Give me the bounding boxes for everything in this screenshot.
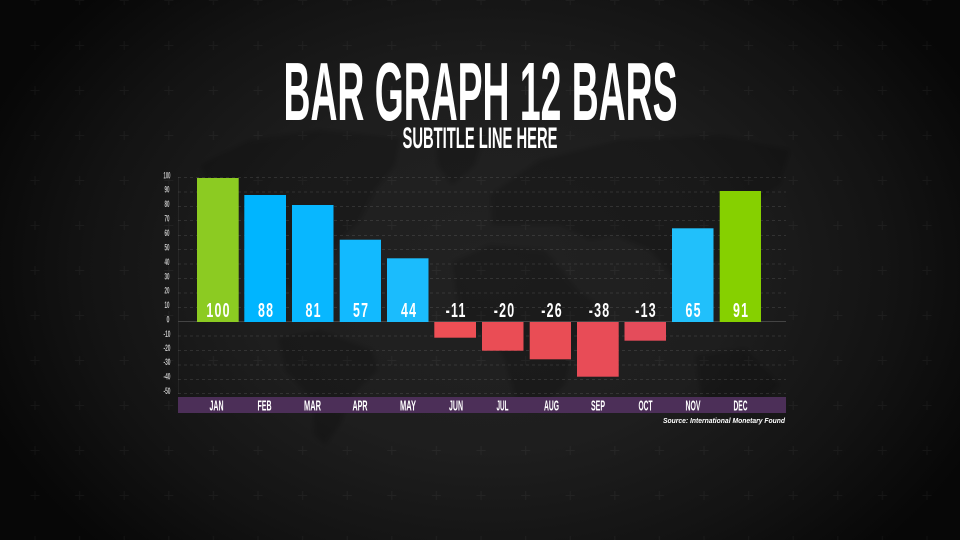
y axis labels: 90 xyxy=(164,184,170,196)
y axis labels: 0 xyxy=(166,314,170,326)
world map background xyxy=(200,130,790,445)
bar: DEC 91 xyxy=(720,191,761,322)
month labels: MAY xyxy=(400,398,416,414)
chart grid lines xyxy=(178,178,786,394)
month labels: OCT xyxy=(638,398,652,414)
bar: SEP -38 xyxy=(577,322,619,377)
value labels: 65 xyxy=(685,299,702,322)
bar: APR 57 xyxy=(340,240,381,322)
map: Africa xyxy=(452,245,598,412)
value labels: -13 xyxy=(635,299,657,322)
bar: MAY 44 xyxy=(387,258,428,322)
value labels: 44 xyxy=(401,299,417,322)
y axis labels: -40 xyxy=(164,372,170,382)
text: DEC xyxy=(734,398,748,414)
month labels: JAN xyxy=(210,398,224,414)
value labels: 88 xyxy=(258,299,274,322)
month labels: JUL xyxy=(496,398,508,414)
value labels: 91 xyxy=(733,299,749,322)
value labels: -26 xyxy=(541,299,563,322)
map: Australia xyxy=(695,348,780,410)
value labels: 100 xyxy=(206,299,231,322)
month labels: JUN xyxy=(449,398,463,414)
map: Europe and Asia xyxy=(490,135,790,280)
y axis labels: 10 xyxy=(164,300,170,311)
value labels: -38 xyxy=(589,299,610,322)
month labels: AUG xyxy=(544,398,559,414)
y axis labels: -10 xyxy=(164,329,170,340)
text: SUBTITLE LINE HERE xyxy=(402,122,558,155)
y axis labels: 60 xyxy=(164,228,170,239)
text: 100 xyxy=(164,170,170,182)
bar: JAN 100 xyxy=(197,178,239,322)
month labels: SEP xyxy=(591,398,605,414)
value labels: 81 xyxy=(305,299,322,322)
y axis labels: 80 xyxy=(164,199,170,210)
map: Greenland xyxy=(435,132,485,185)
y axis labels: -50 xyxy=(164,386,170,397)
y axis labels: 40 xyxy=(164,257,170,268)
y axis labels: -30 xyxy=(164,357,170,368)
month labels: MAR xyxy=(304,398,321,414)
bar: JUL -20 xyxy=(482,322,524,351)
value labels xyxy=(206,299,749,322)
y axis labels: -20 xyxy=(164,343,170,354)
month labels: APR xyxy=(352,398,368,414)
month labels xyxy=(210,398,748,414)
y axis labels: 50 xyxy=(164,242,170,254)
month labels: FEB xyxy=(258,398,272,414)
map: North America xyxy=(200,130,400,300)
value labels: -20 xyxy=(494,299,515,322)
y axis labels: 30 xyxy=(164,272,170,282)
value labels: 57 xyxy=(353,299,369,322)
value labels: -11 xyxy=(446,299,467,322)
bar: FEB 88 xyxy=(244,195,286,322)
bar: AUG -26 xyxy=(530,322,571,359)
y axis labels: 20 xyxy=(164,286,170,296)
y axis labels: 70 xyxy=(164,214,170,224)
bar: MAR 81 xyxy=(292,205,334,322)
bar: OCT -13 xyxy=(624,322,666,341)
map: South America xyxy=(278,330,378,445)
y axis labels xyxy=(164,170,170,397)
bar: NOV 65 xyxy=(672,228,714,322)
source note: Source: International Monetary Found xyxy=(663,416,785,425)
zero axis line xyxy=(178,320,786,322)
bar: JUN -11 xyxy=(434,322,476,338)
month band xyxy=(178,397,786,413)
month labels: NOV xyxy=(686,398,700,414)
